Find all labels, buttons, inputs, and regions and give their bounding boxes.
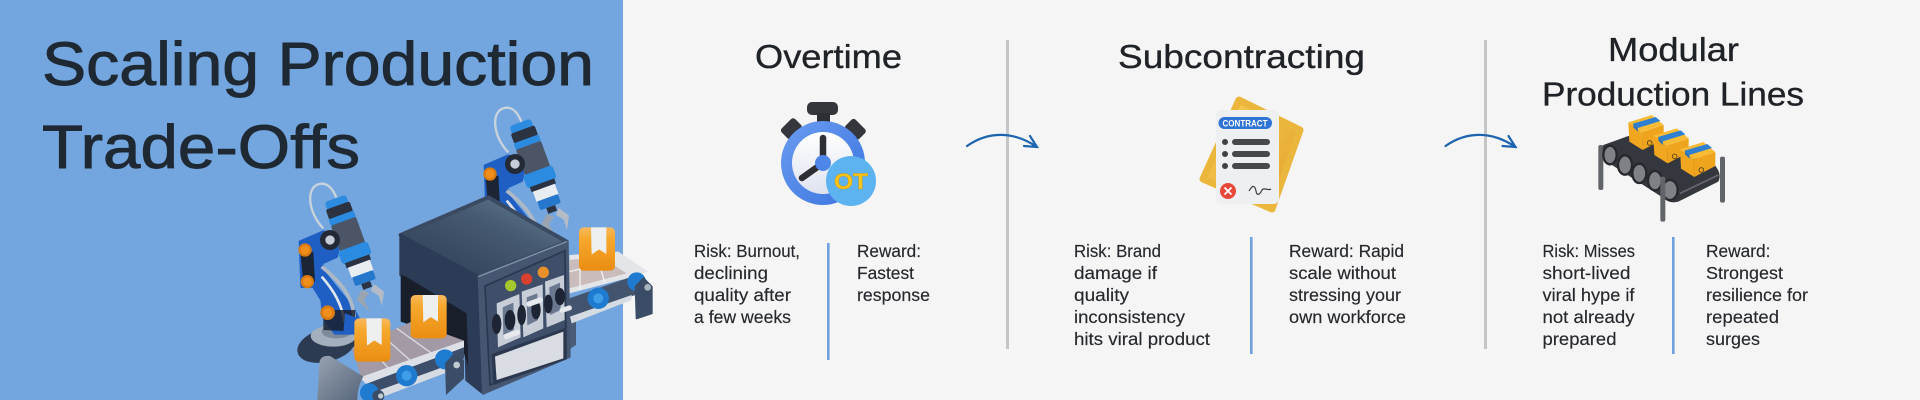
text: subcontracting reward: scale without xyxy=(1289,263,1396,283)
text: overtime reward: Reward: xyxy=(857,241,921,261)
text: modular reward: Reward: xyxy=(1706,241,1770,261)
text: modular reward: surges xyxy=(1706,329,1760,349)
text: modular reward: repeated xyxy=(1706,307,1779,327)
text: modular reward: resilience for xyxy=(1706,285,1808,305)
icon: production line machine with robot arms xyxy=(293,108,652,400)
text: subcontracting reward: Reward: Rapid xyxy=(1289,241,1404,261)
panel: subcontracting xyxy=(1074,38,1406,354)
heading: subcontracting: Subcontracting xyxy=(1118,38,1365,75)
panel: title panel xyxy=(0,0,623,400)
heading: overtime: Overtime xyxy=(755,38,902,75)
title: Trade-Offs xyxy=(42,113,360,181)
panel: modular production lines xyxy=(1542,31,1808,354)
text: modular reward xyxy=(1706,241,1808,349)
divider: overtime risk and reward xyxy=(827,243,830,360)
text: overtime risk: declining xyxy=(694,263,768,283)
text: subcontracting risk: hits viral product xyxy=(1074,329,1210,349)
icon: contract document on folder: CONTRACT xyxy=(1222,118,1268,130)
arrow: subcontracting to modular lines xyxy=(1446,135,1516,147)
divider: between subcontracting and modular lines xyxy=(1484,40,1487,349)
text: overtime risk: Risk: Burnout, xyxy=(694,241,800,261)
icon: stopwatch with OT badge: OT xyxy=(834,169,869,194)
text: modular risk: viral hype if xyxy=(1542,285,1635,305)
text: overtime reward: Fastest xyxy=(857,263,914,283)
text: subcontracting risk xyxy=(1074,241,1210,349)
text: modular risk: not already xyxy=(1542,307,1635,327)
icon: contract document on folder xyxy=(1203,100,1300,209)
text: subcontracting risk: inconsistency xyxy=(1074,307,1185,327)
icon: stopwatch with OT badge xyxy=(780,102,876,206)
title: Scaling Production xyxy=(42,30,594,98)
text: modular risk: prepared xyxy=(1542,329,1616,349)
icon: conveyor with boxes xyxy=(1598,115,1725,222)
text: overtime reward: response xyxy=(857,285,930,305)
heading: modular production lines: Modular xyxy=(1608,31,1739,68)
text: subcontracting reward xyxy=(1289,241,1406,327)
text: subcontracting reward: own workforce xyxy=(1289,307,1406,327)
text: modular risk: Risk: Misses xyxy=(1542,241,1635,261)
text: overtime risk: quality after xyxy=(694,285,791,305)
text: modular reward: Strongest xyxy=(1706,263,1783,283)
heading: modular production lines: Production Lines xyxy=(1542,76,1804,112)
text: subcontracting risk: damage if xyxy=(1074,263,1157,283)
heading: modular production lines xyxy=(1542,31,1804,112)
divider: subcontracting risk and reward xyxy=(1250,237,1253,354)
text: overtime risk: a few weeks xyxy=(694,307,791,327)
divider: modular risk and reward xyxy=(1672,237,1675,354)
divider: between overtime and subcontracting xyxy=(1006,40,1009,349)
arrow: overtime to subcontracting xyxy=(967,135,1037,147)
text: overtime risk xyxy=(694,241,800,327)
panel: overtime xyxy=(694,38,930,360)
text: subcontracting risk: quality xyxy=(1074,285,1129,305)
text: subcontracting reward: stressing your xyxy=(1289,285,1401,305)
text: modular risk xyxy=(1542,241,1635,349)
text: overtime reward xyxy=(857,241,930,305)
text: subcontracting risk: Risk: Brand xyxy=(1074,241,1161,261)
title xyxy=(42,30,594,181)
text: modular risk: short-lived xyxy=(1542,263,1630,283)
